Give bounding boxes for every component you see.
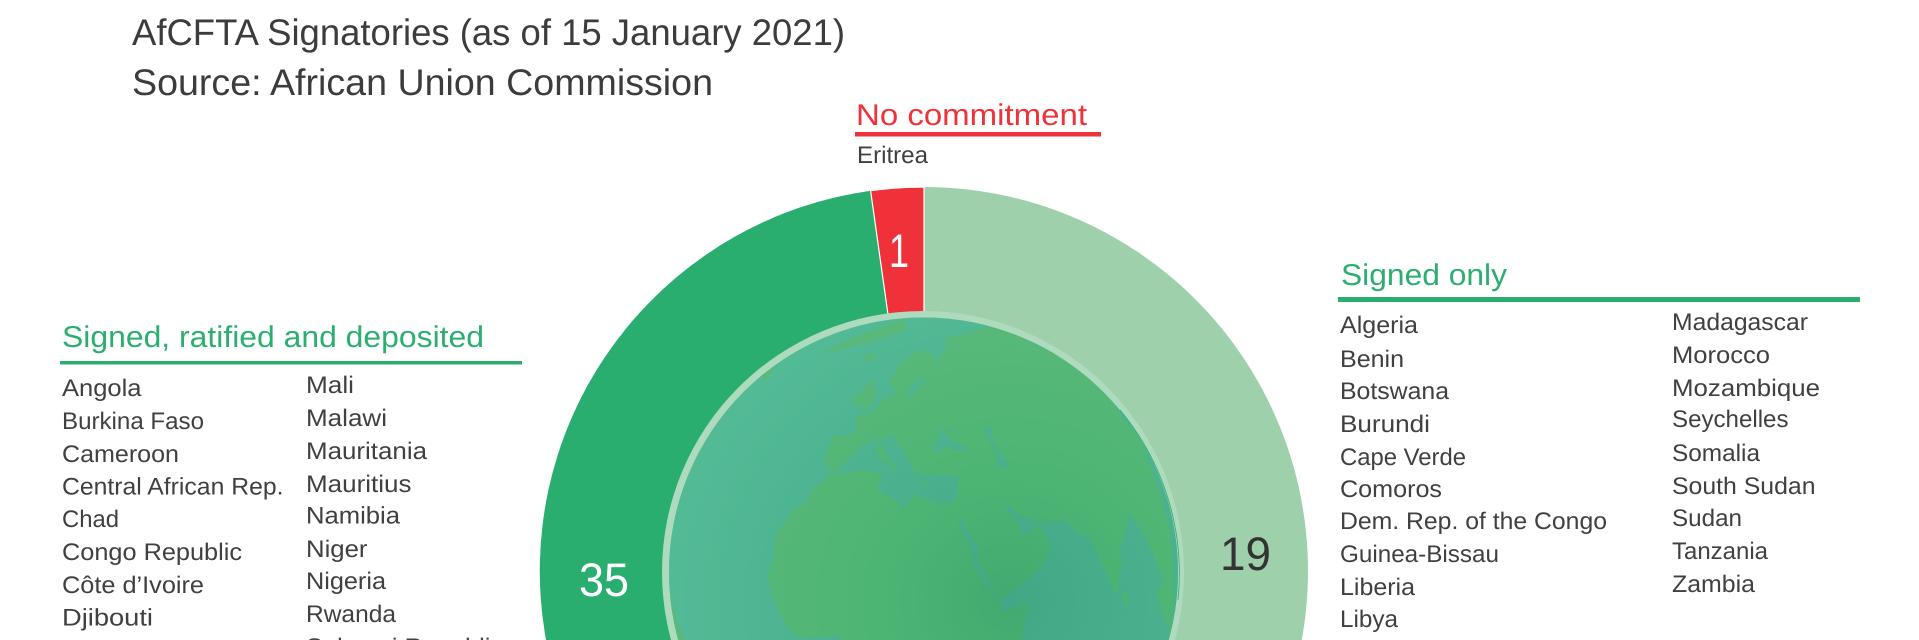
country list: ratified, first column: Burkina Faso <box>62 408 204 435</box>
country list: ratified, second column: Mauritius <box>306 471 412 498</box>
value: 1: 1 <box>889 224 909 277</box>
country list: signed only, first column: Comoros <box>1340 476 1442 503</box>
country list: ratified, second column <box>306 372 503 640</box>
Mediterranean Sea <box>833 433 958 507</box>
country list: ratified, first column: Djibouti <box>62 604 153 632</box>
segment: signed only (19) <box>924 187 1308 640</box>
country list: ratified, second column: Rwanda <box>306 601 397 628</box>
country list: ratified, first column <box>62 375 284 632</box>
globe sphere with land masses <box>669 318 1178 640</box>
country list: ratified, second column: Malawi <box>306 405 387 432</box>
value: 19: 19 <box>1220 527 1271 580</box>
Persian Gulf <box>1004 505 1035 533</box>
country list: signed only, second column: Mozambique <box>1672 375 1820 402</box>
country list: signed only, first column: Benin <box>1340 346 1404 373</box>
globe illustration <box>662 311 1184 640</box>
segment: signed, ratified and deposited (35) <box>540 191 924 640</box>
Iceland <box>862 353 877 362</box>
country: Eritrea: Eritrea <box>857 142 929 169</box>
Sri Lanka <box>1122 590 1129 607</box>
limb ocean sliver <box>981 324 1178 626</box>
value: 35: 35 <box>579 553 629 606</box>
country list: signed only, second column: Madagascar <box>1672 309 1808 336</box>
Italy, Greece and Cyprus <box>876 443 929 484</box>
country list: ratified, first column: Angola <box>62 375 142 402</box>
country list: ratified, first column: Côte d’Ivoire <box>62 572 204 599</box>
country list: signed only, first column: Liberia <box>1340 574 1416 601</box>
title: AfCFTA Signatories (as of 15 January 2021) <box>132 12 845 53</box>
Red Sea <box>957 520 998 597</box>
country list: signed only, second column: South Sudan <box>1672 473 1816 500</box>
Canadian Arctic <box>758 365 777 382</box>
country list: signed only, first column <box>1340 312 1607 633</box>
country list: signed only, first column: Guinea-Bissau <box>1340 541 1499 568</box>
country list: signed only, first column: Libya <box>1340 606 1399 633</box>
country list: signed only, second column: Zambia <box>1672 571 1756 598</box>
source line: Source: African Union Commission <box>132 62 713 103</box>
Caspian Sea <box>983 425 1008 468</box>
panel: no commitment <box>855 99 1101 169</box>
country list: signed only, first column: Dem. Rep. of the Congo <box>1340 508 1607 535</box>
Indian Ocean <box>999 513 1170 640</box>
country list: ratified, second column: Mauritania <box>306 438 428 465</box>
country list: ratified, first column: Chad <box>62 506 119 533</box>
country list: signed only, first column: Burundi <box>1340 411 1430 438</box>
Black Sea <box>933 427 969 453</box>
country list: signed only, first column: Algeria <box>1340 312 1419 339</box>
country list: ratified, first column: Central African Rep. <box>62 474 284 500</box>
country list: signed only, second column: Seychelles <box>1672 406 1788 433</box>
country list: signed only, first column: Cape Verde <box>1340 444 1466 471</box>
heading rule <box>855 132 1101 136</box>
globe outline <box>1120 410 1179 600</box>
country list: signed only, first column: Botswana <box>1340 378 1450 405</box>
heading: signed only: Signed only <box>1341 259 1507 292</box>
segment: no commitment (1) <box>871 187 924 571</box>
country list: ratified, second column: Niger <box>306 536 368 563</box>
country list: signed only, second column: Morocco <box>1672 342 1770 369</box>
heading rule <box>1338 297 1860 302</box>
country list: ratified, second column: Nigeria <box>306 568 387 595</box>
country list: signed only, second column: Tanzania <box>1672 538 1769 565</box>
country list: signed only, second column <box>1672 309 1820 598</box>
heading: signed, ratified and deposited: Signed, ratified and deposited <box>62 321 484 354</box>
country list: ratified, second column: Mali <box>306 372 354 399</box>
heading rule <box>60 361 522 364</box>
globe rim <box>662 311 1184 640</box>
country list: signed only, second column: Somalia <box>1672 440 1761 467</box>
Greenland <box>822 318 908 353</box>
country list: ratified, first column: Congo Republic <box>62 539 242 566</box>
country list: ratified, second column: Namibia <box>306 502 401 530</box>
country list: ratified, first column: Cameroon <box>62 441 179 468</box>
panel: signed only <box>1338 259 1860 633</box>
British Isles <box>851 378 876 410</box>
country list: signed only, second column: Sudan <box>1672 505 1742 532</box>
Atlantic and Arctic Ocean <box>669 318 981 640</box>
donut chart <box>540 187 1308 640</box>
Baltic Sea <box>902 368 927 395</box>
South America edge <box>670 596 686 640</box>
panel: signed, ratified and deposited <box>60 321 522 640</box>
heading: no commitment: No commitment <box>856 99 1088 132</box>
land base <box>669 318 1178 640</box>
